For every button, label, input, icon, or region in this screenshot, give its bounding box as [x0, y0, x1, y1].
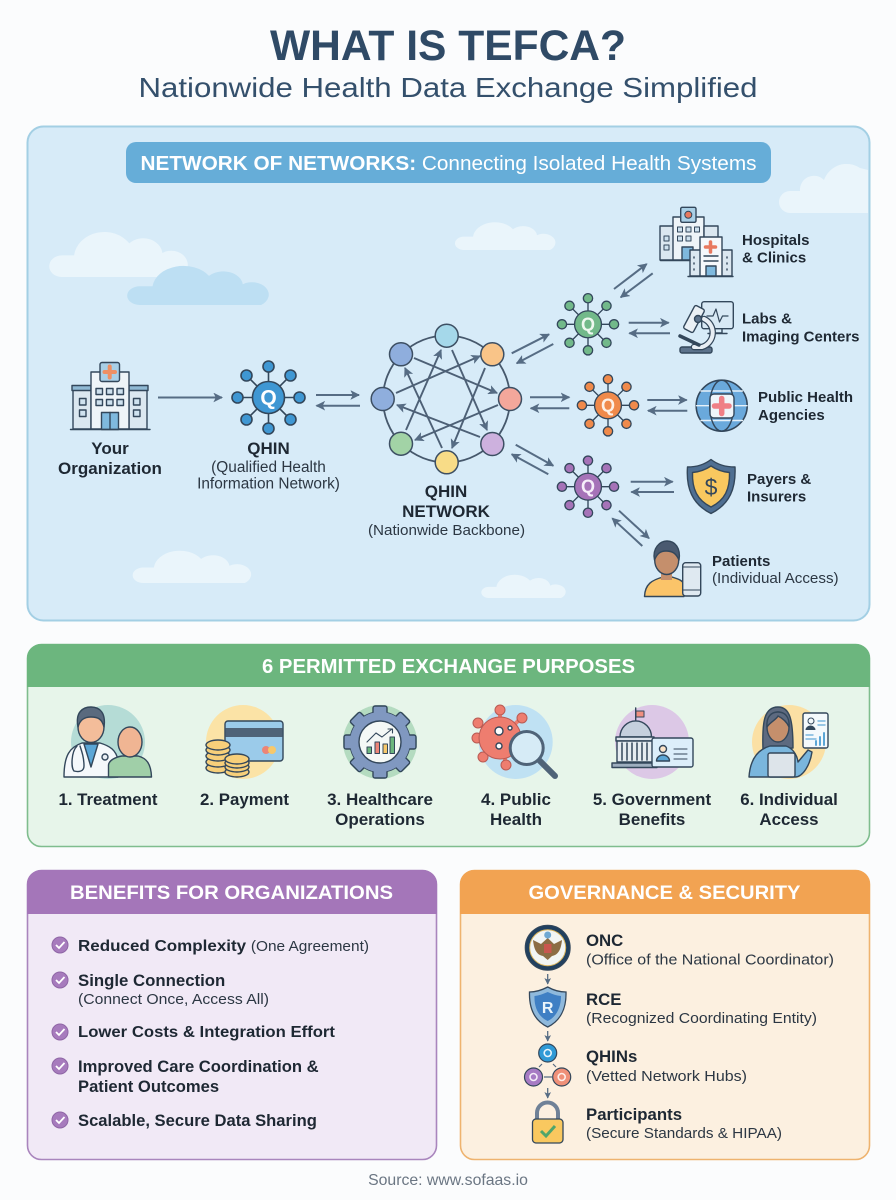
arrows: orange hub to public health: [647, 400, 687, 411]
label: patients: [712, 553, 839, 587]
label: patients: (Individual Access): [712, 570, 839, 587]
icon: patient with phone: [644, 541, 701, 596]
label: QHIN: [197, 439, 340, 492]
label: QHINs: [586, 1047, 747, 1085]
label: QHINs: QHINs: [586, 1047, 637, 1066]
label: ONC: [586, 931, 834, 968]
panel header: [27, 644, 870, 687]
benefit: single connection: (Connect Once, Access All): [78, 991, 269, 1008]
arrow: organization to QHIN: [158, 396, 222, 398]
label: QHIN network: QHIN: [425, 482, 467, 501]
subtitle: Nationwide Health Data Exchange Simplified: [138, 72, 758, 103]
panel: benefits for organizations: [27, 870, 437, 1160]
cloud bottom left: [133, 551, 251, 583]
icon: hospitals and clinics: [660, 207, 733, 276]
arrows: QHIN to network: [316, 395, 360, 406]
section heading pill: [126, 142, 771, 183]
arrows: network to purple hub: [512, 445, 553, 474]
panel header: [27, 870, 437, 914]
diagram: QHIN network ring: [371, 324, 522, 474]
arrow: ONC to RCE: [547, 974, 549, 984]
benefit: improved care coordination: [78, 1057, 319, 1096]
arrows: purple hub to payers: [631, 482, 674, 492]
label: RCE: (Recognized Coordinating Entity): [586, 1011, 817, 1027]
label: QHIN network: (Nationwide Backbone): [368, 522, 525, 539]
icon: green hub: Q: [581, 314, 595, 334]
icon: green hub: [557, 294, 619, 355]
label: individual access: 6. Individual: [740, 790, 838, 809]
panel heading: GOVERNANCE & SECURITY: [528, 882, 800, 904]
arrow: QHINs to participants: [547, 1088, 549, 1098]
label: QHINs: (Vetted Network Hubs): [586, 1069, 747, 1085]
label: labs and imaging: Imaging Centers: [742, 328, 860, 346]
source line: Source: www.sofaas.io: [368, 1172, 528, 1189]
benefit: single connection: Single Connection: [78, 971, 225, 990]
label: public health: Agencies: [758, 407, 825, 424]
icon: healthcare operations gear: [343, 705, 417, 779]
label: treatment: 1. Treatment: [58, 791, 158, 809]
benefit: improved care coordination: Improved Care Coordination &: [78, 1057, 319, 1076]
label: QHIN: (Qualified Health: [211, 459, 326, 476]
cloud centre: [455, 222, 555, 250]
label: patients: Patients: [712, 553, 770, 570]
label: payers and insurers: [747, 471, 811, 506]
icon: government benefits: [612, 705, 693, 779]
section heading pill: NETWORK OF NETWORKS: Connecting Isolated Health Systems: [140, 153, 756, 175]
arrows: network to orange hub: [530, 397, 569, 408]
label: labs and imaging: [742, 310, 860, 346]
icon: individual access: [749, 705, 828, 779]
icon: orange hub: Q: [601, 395, 615, 415]
label: hospitals and clinics: Hospitals: [742, 232, 810, 249]
label: your organization: Your: [91, 439, 129, 458]
benefit: scalable sharing: Scalable, Secure Data Sharing: [78, 1111, 317, 1130]
cloud top left: [49, 232, 188, 277]
panel: governance and security: [460, 870, 870, 1160]
benefit: improved care coordination: Patient Outcomes: [78, 1077, 219, 1096]
benefit: reduced complexity: Reduced Complexity (One Agreement): [78, 938, 369, 955]
benefit: single connection: [78, 971, 269, 1008]
icon: participants lock: [532, 1102, 563, 1143]
label: hospitals and clinics: & Clinics: [742, 250, 806, 266]
icon: RCE shield: [529, 987, 566, 1027]
label: government benefits: Benefits: [619, 810, 685, 829]
cloud bottom right: [481, 575, 566, 598]
icon: payment: [206, 705, 283, 779]
icon: payers shield: $: [705, 474, 718, 500]
arrow: RCE to QHINs: [547, 1031, 549, 1041]
label: public health: 4. Public: [481, 790, 551, 809]
label: QHIN: QHIN: [247, 439, 290, 458]
icon: RCE shield: R: [542, 1000, 554, 1017]
label: payment: 2. Payment: [200, 791, 290, 809]
label: ONC: (Office of the National Coordinator): [586, 952, 834, 968]
icon: main QHIN hub: Q: [260, 386, 277, 410]
panel: 6 permitted exchange purposes: [27, 644, 870, 846]
label: public health: Public Health: [758, 389, 853, 406]
label: public health: [758, 389, 853, 424]
label: payers and insurers: Payers &: [747, 471, 811, 488]
check icons: [52, 937, 68, 1128]
icon: purple hub: Q: [581, 477, 595, 497]
arrows: purple hub to patients: [612, 511, 649, 546]
arrows: green hub to hospitals: [614, 264, 653, 297]
icon: purple hub: [557, 456, 619, 517]
label: QHIN network: [368, 482, 525, 539]
panel heading: BENEFITS FOR ORGANIZATIONS: [70, 882, 393, 904]
cloud top right: [779, 164, 868, 213]
label: government benefits: 5. Government: [593, 790, 712, 809]
label: RCE: [586, 990, 817, 1027]
label: labs and imaging: Labs &: [742, 310, 792, 328]
label: QHIN: Information Network): [197, 476, 340, 492]
label: your organization: Organization: [58, 459, 162, 478]
label: public health: [481, 790, 551, 829]
label: government benefits: [593, 790, 712, 829]
icon: treatment: [64, 705, 152, 779]
label: public health: Health: [490, 810, 542, 829]
icon: orange hub: [577, 375, 639, 436]
label: RCE: RCE: [586, 990, 621, 1009]
label: healthcare operations: [327, 790, 433, 829]
label: your organization: [58, 439, 162, 478]
arrows: green hub to labs: [629, 323, 670, 333]
label: participants: Participants: [586, 1105, 682, 1124]
label: QHIN network: NETWORK: [402, 502, 491, 521]
label: participants: (Secure Standards & HIPAA): [586, 1126, 782, 1142]
icon: your organization hospital: [70, 362, 150, 430]
label: individual access: [740, 790, 838, 829]
title: WHAT IS TEFCA?: [270, 22, 626, 70]
label: hospitals and clinics: [742, 232, 810, 266]
icon: payers shield: [687, 460, 735, 514]
panel header: [460, 870, 870, 914]
icon: public health virus: [472, 705, 555, 779]
icon: ONC seal: [525, 925, 570, 970]
arrows: network to green hub: [512, 334, 553, 363]
cloud blue: [127, 266, 269, 305]
label: payers and insurers: Insurers: [747, 488, 806, 506]
icon: QHINs hubs: [524, 1044, 571, 1086]
icon: main QHIN hub: [232, 361, 305, 434]
icon: labs and imaging: [680, 302, 733, 353]
panel heading: 6 PERMITTED EXCHANGE PURPOSES: [262, 656, 635, 678]
panel: network of networks: [28, 126, 870, 620]
label: participants: [586, 1105, 782, 1142]
label: healthcare operations: Operations: [335, 810, 425, 829]
label: individual access: Access: [759, 810, 819, 829]
label: healthcare operations: 3. Healthcare: [327, 790, 433, 809]
label: ONC: ONC: [586, 931, 623, 950]
icon: public health globe: [696, 380, 747, 431]
benefit: lower costs: Lower Costs & Integration Effort: [78, 1024, 336, 1041]
